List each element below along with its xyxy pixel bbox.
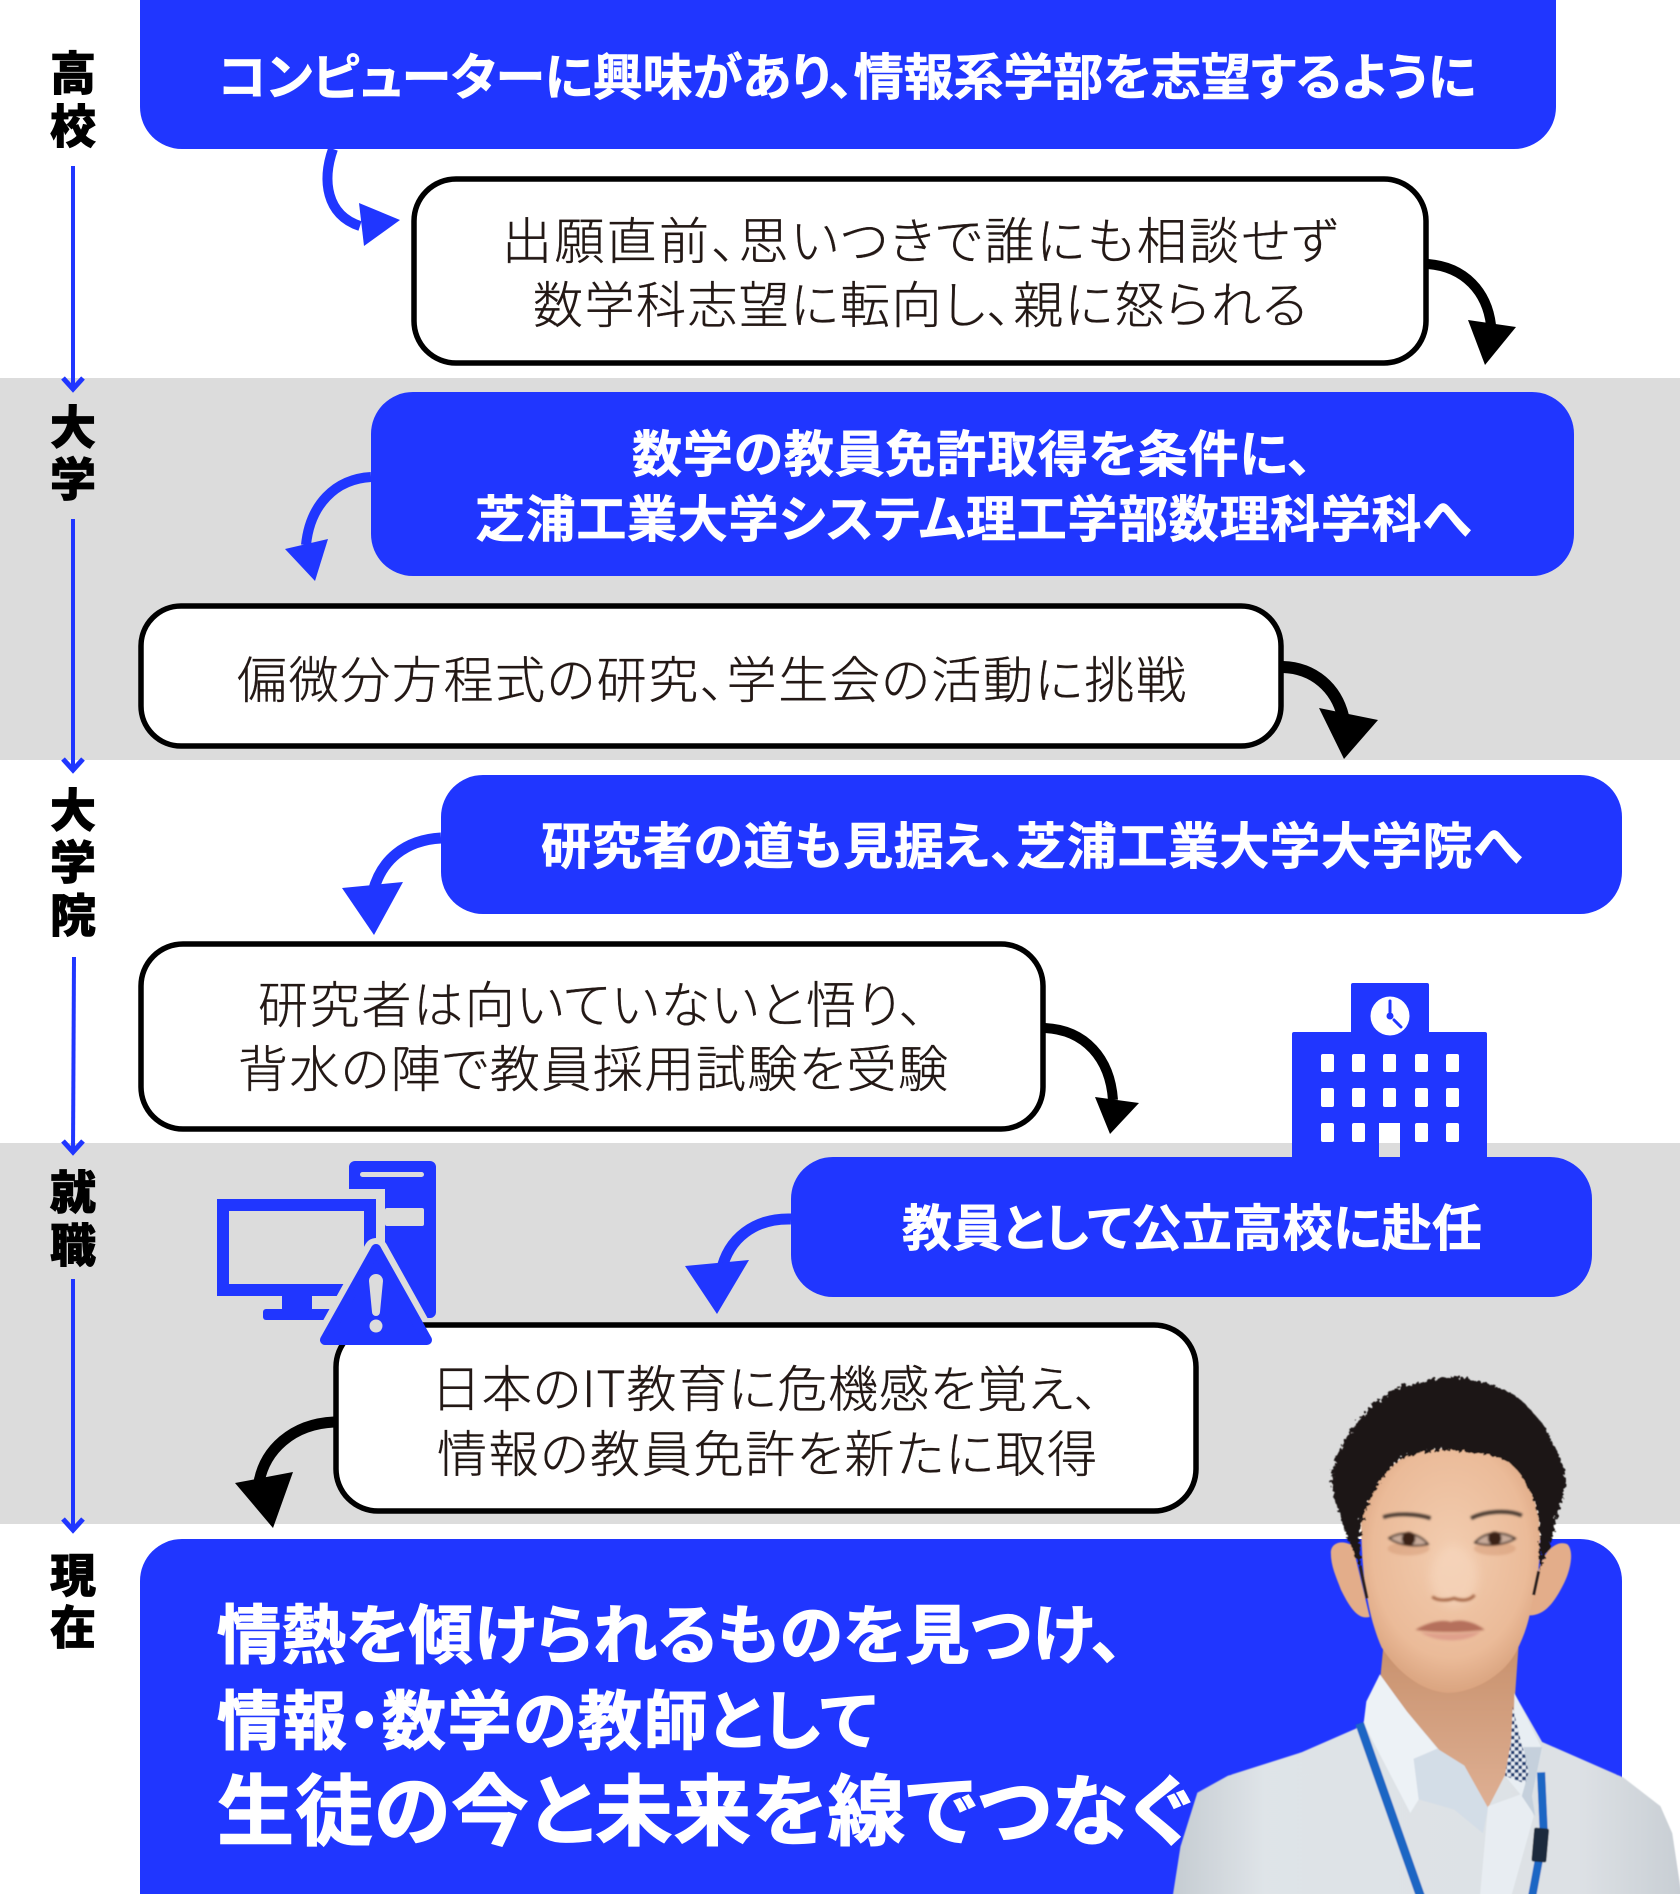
arrow: black curve to present	[235, 1422, 334, 1528]
white step: changed to math: 数学科志望に転向し、親に怒られる	[533, 278, 1307, 334]
timeline label: employment: 職	[50, 1220, 96, 1272]
timeline label: university: 大	[50, 402, 96, 454]
blue step: public high school teacher: 教員として公立高校に赴任	[902, 1201, 1482, 1257]
portrait: teacher	[1172, 1377, 1680, 1894]
timeline label: graduate school: 大	[50, 785, 96, 837]
timeline arrow: university to graduate school	[63, 519, 83, 770]
timeline label: high school	[50, 48, 96, 153]
blue step: interest in computers: コンピューターに興味があり、情報系学部を志望するように	[218, 50, 1476, 106]
timeline label: graduate school: 院	[50, 890, 96, 942]
background band: university	[0, 378, 1680, 760]
white step: new IT license: 情報の教員免許を新たに取得	[437, 1427, 1097, 1483]
white step: new IT license	[336, 1325, 1196, 1511]
arrow: black curve to graduate school	[1283, 667, 1378, 759]
blue panel: present message: 情報・数学の教師として	[217, 1686, 876, 1758]
arrow: blue curve to second white box	[285, 477, 371, 581]
white step: research and student council: 偏微分方程式の研究、学生会の活動に挑戦	[237, 653, 1186, 709]
white step: teacher exam	[141, 944, 1043, 1129]
timeline arrow: employment to present	[63, 1279, 83, 1530]
white step: changed to math	[414, 179, 1426, 363]
icon: warning triangle	[325, 1249, 427, 1340]
blue step: graduate school: 研究者の道も見据え、芝浦工業大学大学院へ	[541, 819, 1522, 875]
blue panel: present message: 情熱を傾けられるものを見つけ、	[217, 1600, 1123, 1672]
white step: research and student council	[141, 606, 1281, 746]
blue panel: present message: 生徒の今と未来を線でつなぐ	[217, 1770, 1191, 1856]
arrow: blue curve to third white box	[342, 838, 441, 935]
blue step: public high school teacher	[791, 1157, 1592, 1297]
blue step: interest in computers	[140, 0, 1556, 149]
timeline label: employment: 就	[50, 1167, 96, 1219]
timeline arrow: graduate school to employment	[63, 957, 83, 1152]
blue panel: present message	[140, 1539, 1622, 1894]
timeline label: university	[50, 402, 96, 506]
timeline label: present: 在	[50, 1602, 96, 1654]
timeline label: present	[50, 1550, 96, 1654]
blue step: enrolled at Shibaura: 芝浦工業大学システム理工学部数理科学科へ	[475, 492, 1471, 548]
arrow: blue curve to first white box	[328, 149, 400, 246]
arrow: black curve to employment	[1045, 1028, 1139, 1134]
white step: changed to math: 出願直前、思いつきで誰にも相談せず	[502, 214, 1338, 270]
timeline label: high school: 高	[50, 48, 96, 100]
arrow: black curve to university	[1428, 264, 1516, 365]
blue step: enrolled at Shibaura	[371, 392, 1574, 576]
icon: computer tower and monitor	[217, 1161, 436, 1340]
blue step: graduate school	[441, 775, 1622, 914]
white step: new IT license: 日本のIT教育に危機感を覚え、	[431, 1350, 1099, 1422]
timeline label: graduate school: 学	[50, 837, 96, 889]
background band: employment	[0, 1143, 1680, 1524]
arrow: blue curve to fourth white box	[685, 1219, 791, 1314]
timeline label: present: 現	[50, 1550, 96, 1602]
white step: teacher exam: 背水の陣で教員採用試験を受験	[238, 1042, 948, 1098]
icon: school building	[1292, 983, 1487, 1160]
blue step: enrolled at Shibaura: 数学の教員免許取得を条件に、	[632, 427, 1312, 483]
timeline label: high school: 校	[50, 101, 96, 153]
timeline arrow: high school to university	[63, 166, 83, 389]
white step: teacher exam: 研究者は向いていないと悟り、	[258, 978, 924, 1034]
timeline label: university: 学	[50, 454, 96, 506]
timeline label: graduate school	[50, 785, 96, 942]
timeline label: employment	[50, 1167, 96, 1272]
